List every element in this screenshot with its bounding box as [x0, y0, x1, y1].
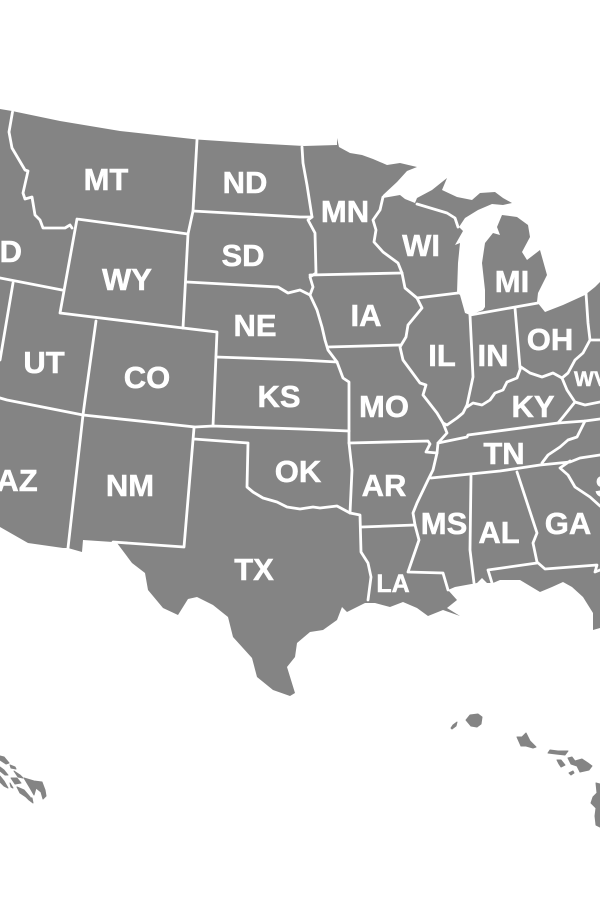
- island: Maui: [568, 757, 592, 772]
- label: AR: AR: [362, 468, 406, 503]
- label: LA: LA: [376, 570, 410, 598]
- label: IL: IL: [428, 338, 456, 373]
- label: NE: NE: [233, 308, 277, 343]
- label: IA: IA: [350, 298, 382, 333]
- label: ND: ND: [223, 165, 267, 200]
- label: WI: WI: [402, 228, 440, 263]
- label: MT: MT: [84, 162, 128, 197]
- label: OH: OH: [527, 322, 573, 357]
- label: CO: CO: [124, 360, 170, 395]
- island: Lanai: [557, 760, 565, 767]
- Hawaii islands: [451, 714, 600, 827]
- label: TN: TN: [483, 436, 525, 471]
- island: Oahu: [517, 733, 536, 748]
- label: KS: KS: [257, 379, 301, 414]
- state labels: [0, 162, 600, 598]
- label: UT: UT: [23, 345, 65, 380]
- label: WY: WY: [102, 262, 152, 297]
- island: Hawaii Big Island: [591, 783, 600, 827]
- island: Kauai: [466, 714, 482, 727]
- label: TX: TX: [234, 552, 274, 587]
- island: Molokai: [548, 750, 568, 755]
- label: GA: GA: [545, 506, 591, 541]
- island: Niihau: [451, 722, 457, 729]
- state borders: [0, 112, 600, 600]
- contiguous US silhouette: [0, 109, 600, 696]
- label: AL: AL: [478, 515, 520, 550]
- label: IN: IN: [478, 338, 508, 373]
- label: MI: MI: [495, 264, 529, 299]
- label: MS: MS: [421, 506, 467, 541]
- label: OK: OK: [275, 454, 322, 489]
- Alaska island chain: [0, 756, 46, 803]
- label: KY: KY: [511, 389, 555, 424]
- label: MN: MN: [321, 194, 369, 229]
- label: MO: MO: [359, 389, 409, 424]
- label: NM: NM: [106, 468, 154, 503]
- label: SD: SD: [221, 238, 265, 273]
- island: Kahoolawe: [569, 771, 574, 775]
